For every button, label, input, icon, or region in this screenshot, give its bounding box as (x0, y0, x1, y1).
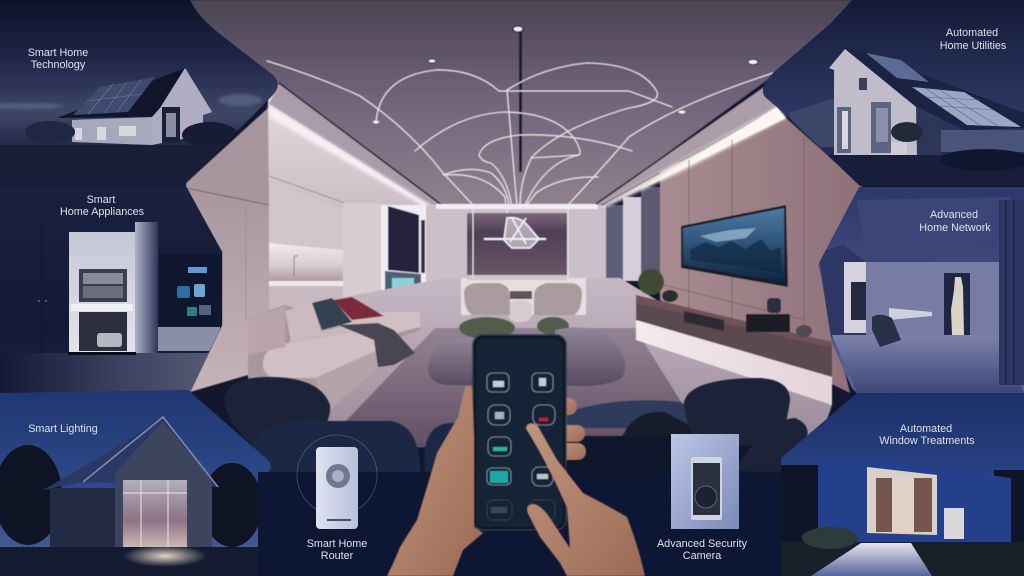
left column (186, 108, 269, 392)
label (657, 538, 748, 562)
right armchair arm (735, 418, 808, 476)
router device (316, 447, 358, 529)
back wall (424, 205, 610, 283)
centre rod and downlights (373, 26, 758, 172)
icon: house at dusk (43, 417, 218, 548)
heading (879, 424, 974, 444)
panel: central living room (180, 0, 862, 450)
panel: automated window treatments (778, 392, 1024, 576)
label (307, 538, 367, 562)
planters (459, 317, 569, 339)
curtains (606, 187, 664, 281)
network lines on ceiling (267, 61, 773, 278)
counter and dining chairs (461, 275, 586, 322)
dark front sofa (258, 472, 784, 576)
clouds (0, 94, 262, 109)
kitchen tower with ovens (68, 222, 158, 355)
icon: solar house (57, 68, 212, 145)
panel: smart home appliances (0, 186, 230, 396)
label: Advanced Security (657, 538, 748, 550)
panel: automated home utilities (755, 0, 1024, 190)
back wall (866, 262, 1001, 335)
floor (260, 278, 832, 440)
trees (781, 465, 1024, 543)
desk and chair (872, 308, 932, 347)
wall screen with digital display (381, 205, 426, 298)
heading (920, 210, 991, 231)
trees and ground (0, 121, 237, 183)
app icons (487, 373, 555, 520)
ceiling (857, 197, 1010, 216)
fingers behind phone (555, 398, 586, 460)
heading: Home Network (919, 222, 991, 234)
label: Router (321, 550, 354, 562)
smart display (158, 254, 224, 351)
pendant chandelier (484, 218, 546, 248)
trees (0, 445, 262, 547)
foreground seating (224, 377, 808, 576)
signal ring (297, 435, 377, 515)
heading: Smart Home (28, 47, 88, 59)
heading (60, 194, 145, 218)
floor (832, 335, 1024, 393)
smart home router (297, 435, 377, 562)
cabinet door (38, 225, 47, 353)
right hand (526, 424, 645, 576)
rug (318, 328, 705, 450)
heading: Technology (31, 59, 86, 71)
floor (0, 353, 208, 393)
purple glass partition (467, 213, 567, 277)
label: Smart Home (307, 538, 367, 550)
portrait door (944, 273, 970, 335)
smartphone (473, 335, 566, 530)
camera wall plate (671, 434, 739, 529)
heading: Advanced (930, 209, 978, 221)
middle cushion (424, 423, 470, 472)
media console (636, 269, 832, 405)
ground (0, 547, 260, 576)
lawn and bushes (778, 527, 1024, 576)
heading (940, 28, 1006, 49)
left wall (819, 245, 866, 337)
panel: smart lighting (0, 388, 280, 576)
ceiling (180, 0, 860, 205)
coffee ottoman with blanket (566, 400, 766, 476)
heading: Smart (87, 194, 115, 206)
app icon fills (490, 378, 548, 513)
navy right armchair (684, 378, 790, 445)
panel: advanced home network (815, 186, 1024, 396)
heading: Home Appliances (60, 206, 145, 218)
heading (28, 47, 88, 71)
heading: Smart Lighting (28, 423, 98, 435)
ottomans (428, 327, 625, 386)
advanced security camera (657, 434, 748, 562)
hand holding phone (387, 335, 645, 576)
heading: Automated (946, 27, 998, 39)
heading: Home Utilities (940, 40, 1007, 52)
light patch (124, 547, 206, 566)
wall mounted TV (681, 205, 788, 287)
icon: solar house (829, 49, 1024, 155)
bushes and lawn (828, 149, 1024, 186)
left hand (387, 386, 483, 576)
curtain (999, 200, 1024, 385)
annex building (789, 98, 834, 147)
heading: Automated (900, 423, 952, 435)
heading: Window Treatments (879, 435, 975, 447)
left wall and cove lighting (268, 78, 445, 320)
walkway (811, 543, 932, 576)
icon: modern house (818, 458, 1011, 543)
panel: smart home technology (0, 0, 290, 190)
label: Camera (683, 550, 721, 562)
right wall with lighting strip (596, 87, 862, 393)
back wall light strip (436, 204, 598, 209)
white doorway (844, 262, 866, 333)
navy rounded cushion (250, 421, 420, 472)
left sofa with cushions (248, 297, 420, 412)
navy left armchair (224, 377, 330, 445)
